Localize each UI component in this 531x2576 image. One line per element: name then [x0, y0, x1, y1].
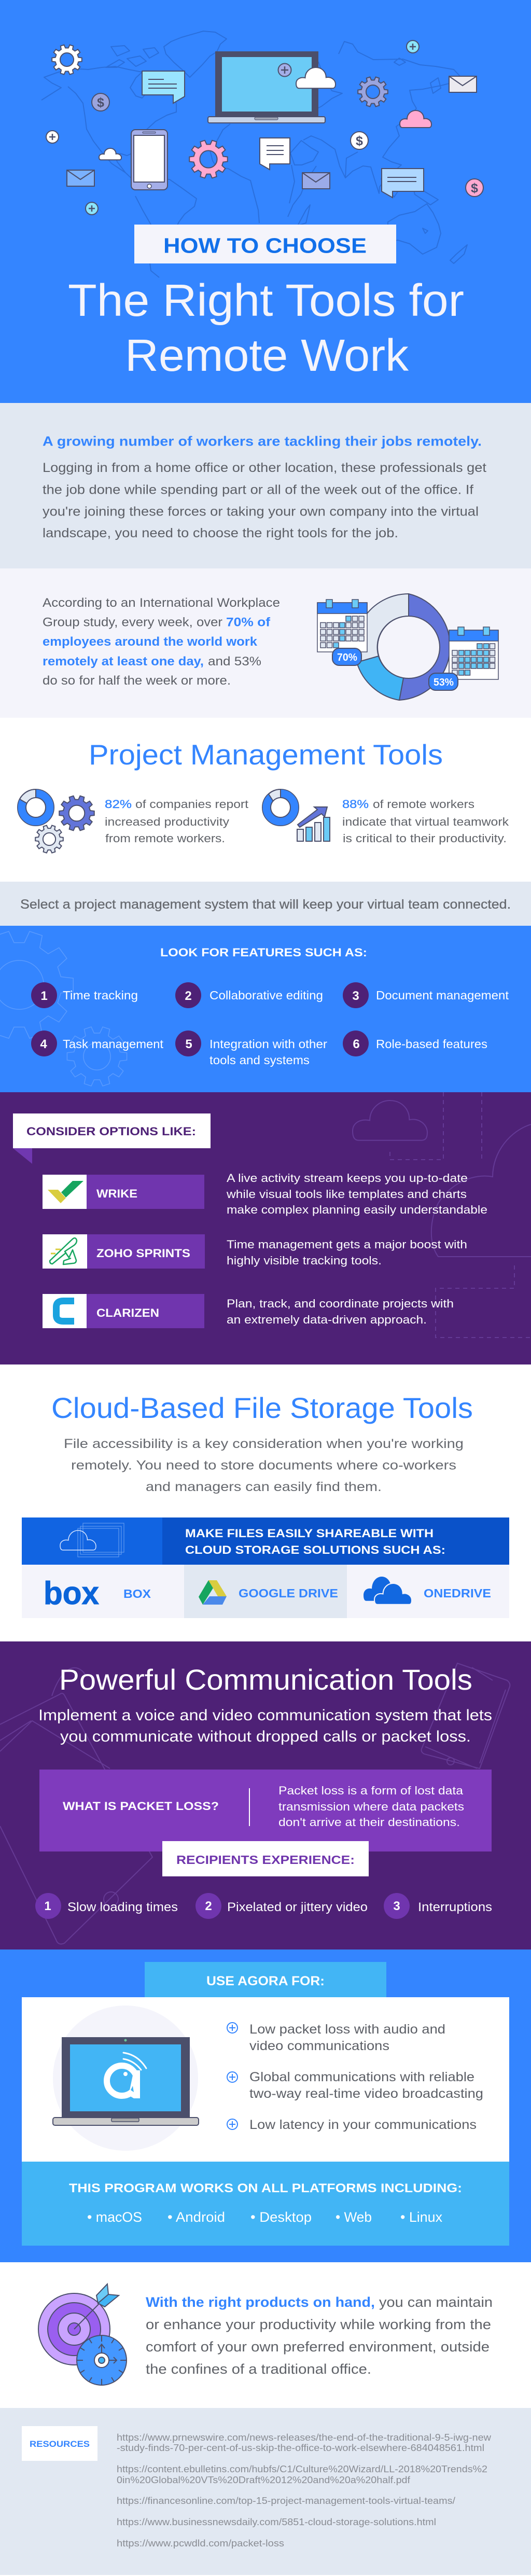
option description: wrike: A live activity stream keeps you up-to-date [227, 1172, 468, 1185]
provider: box [22, 1565, 184, 1618]
icon: speech bubble cyan [142, 71, 185, 103]
platform list: • Linux [400, 2209, 442, 2225]
heading label: how to choose [134, 225, 396, 263]
callout: packet loss [39, 1770, 492, 1851]
benefit 1: Low packet loss with audio and [249, 2022, 445, 2037]
experience 2: Pixelated or jittery video [227, 1900, 368, 1914]
study text [43, 596, 280, 688]
world map outline [41, 31, 467, 277]
icon: dollar coin pink [466, 179, 483, 197]
platform list: • Desktop [250, 2209, 312, 2225]
panel: conclusion [0, 2262, 531, 2408]
conclusion text: the confines of a traditional office. [146, 2361, 371, 2377]
study text: employees around the world work [43, 635, 258, 649]
icon: envelope periwinkle [302, 173, 330, 189]
stat: 88%: indicate that virtual teamwork [342, 815, 509, 828]
intro body text: Logging in from a home office or other location, these professionals get [43, 461, 486, 475]
provider: google drive: GOOGLE DRIVE [239, 1586, 338, 1600]
option description: clarizen [227, 1297, 454, 1326]
band text [185, 1527, 445, 1556]
card: platforms: THIS PROGRAM WORKS ON ALL PLATFORMS INCLUDING: [69, 2181, 462, 2195]
benefit 2: Global communications with reliable [249, 2070, 474, 2084]
intro body text: the job done while spending part or all of the week out of the office. If [43, 482, 473, 497]
icon: document bubble [260, 138, 290, 170]
study text: do so for half the week or more. [43, 674, 231, 688]
stat: 88% [342, 798, 509, 845]
feature 6: Role-based features [376, 1037, 487, 1051]
stat: 82%: from remote workers. [105, 832, 225, 845]
benefit 2: two-way real-time video broadcasting [249, 2086, 483, 2101]
option: zoho sprints [43, 1234, 205, 1269]
study text: According to an International Workplace [43, 596, 280, 610]
communication text [38, 1707, 492, 1745]
source list: https://financesonline.com/top-15-project-management-tools-virtual-teams/ [117, 2496, 455, 2506]
callout: packet loss: transmission where data packets [278, 1800, 464, 1813]
icon: white gear [52, 45, 82, 74]
stat: 88%: is critical to their productivity. [343, 832, 507, 845]
option description: clarizen: an extremely data-driven approach. [227, 1313, 427, 1326]
feature 6: 6 [353, 1037, 360, 1051]
option description: wrike [226, 1172, 487, 1216]
cloud storage text: remotely. You need to store documents where co-workers [71, 1458, 456, 1473]
band text: CLOUD STORAGE SOLUTIONS SUCH AS: [185, 1543, 445, 1556]
option: wrike [43, 1175, 204, 1209]
benefit 1: video communications [249, 2039, 389, 2053]
panel: resources [0, 2408, 531, 2575]
icon: laptop [208, 51, 325, 123]
badge: 53% [429, 673, 458, 690]
callout: packet loss: WHAT IS PACKET LOSS? [63, 1800, 219, 1813]
feature 4: Task management [63, 1037, 164, 1051]
card: agora benefits [22, 1997, 509, 2162]
feature 4 [31, 1031, 164, 1056]
panel: consider options [0, 1092, 531, 1364]
icon: dollar coin white [351, 132, 368, 149]
provider: google drive [184, 1565, 347, 1618]
platform list: • Android [167, 2209, 225, 2225]
experience 3: Interruptions [418, 1900, 492, 1914]
icon: calendar 53% [449, 627, 498, 679]
intro body text: landscape, you need to choose the right tools for the job. [43, 526, 398, 540]
stat: 82%: increased productivity [105, 815, 230, 828]
cloud storage text: File accessibility is a key consideration when you're working [64, 1437, 464, 1451]
label: recipients experience [162, 1841, 369, 1876]
panel: hero [0, 0, 531, 403]
experience 3 [384, 1893, 492, 1919]
provider: box: BOX [123, 1587, 151, 1600]
heading: consider options like [13, 1113, 211, 1164]
heading: cloud storage tools: Cloud-Based File Storage Tools [51, 1391, 473, 1424]
stat: 82%: of companies report [135, 798, 249, 811]
tab: use agora for: USE AGORA FOR: [206, 1974, 325, 1988]
panel: study statistic [0, 568, 531, 718]
icon: blue gear [59, 796, 94, 830]
option description: zoho sprints: Time management gets a major boost with [227, 1238, 467, 1251]
option: clarizen: CLARIZEN [96, 1306, 159, 1319]
panel: cloud storage [0, 1364, 531, 1641]
donut chart [355, 594, 450, 700]
provider: onedrive [347, 1565, 509, 1618]
badge: 70%: 70% [337, 652, 357, 663]
icon: envelope light [449, 76, 477, 92]
conclusion text [146, 2294, 493, 2377]
panel: features [0, 926, 531, 1092]
icon: speech bubble blue [382, 169, 424, 198]
icon: 88% donut [267, 789, 295, 821]
option: clarizen [43, 1294, 204, 1328]
conclusion text: With the right products on hand, [146, 2294, 375, 2310]
stat: 82%: 82% [105, 798, 132, 811]
panel: communication tools [0, 1641, 531, 1950]
experience 2: 2 [205, 1899, 212, 1913]
panel: intro [0, 403, 531, 568]
experience 3: 3 [393, 1899, 400, 1913]
feature 1: Time tracking [63, 988, 138, 1002]
band: shareable files [22, 1517, 509, 1565]
experience 1 [35, 1893, 178, 1919]
panel: project management tools [0, 718, 531, 882]
source list: -study-finds-70-per-cent-of-us-skip-the-office-to-work-elsewhere-684048561.html [117, 2443, 484, 2453]
icon: calendar 70% [317, 600, 367, 652]
feature 2 [175, 982, 323, 1008]
intro body text [43, 461, 486, 540]
band text: MAKE FILES EASILY SHAREABLE WITH [185, 1527, 434, 1540]
heading label: how to choose: HOW TO CHOOSE [163, 233, 367, 257]
heading: powerful communication tools: Powerful Communication Tools [59, 1663, 472, 1696]
icon: dollar coin pink: $ [471, 181, 478, 196]
panel: select band [0, 882, 531, 926]
source list: https://content.ebulletins.com/hubfs/C1/Culture%20Wizard/LL-2018%20Trends%2 [117, 2464, 487, 2474]
experience 1: Slow loading times [67, 1900, 178, 1914]
platform list: • macOS [87, 2209, 142, 2225]
icon: periwinkle gear [358, 77, 388, 106]
feature 3: 3 [352, 989, 359, 1003]
source list: https://www.prnewswire.com/news-releases/the-end-of-the-traditional-9-5-iwg-new [117, 2432, 492, 2443]
conclusion text: comfort of your own preferred environment, outside [146, 2339, 490, 2355]
label: resources: RESOURCES [30, 2439, 90, 2449]
feature 5 [175, 1031, 327, 1067]
label: resources [22, 2426, 97, 2461]
option description: wrike: make complex planning easily understandable [227, 1203, 487, 1216]
source list [117, 2432, 492, 2549]
icon: cloud and files [60, 1523, 124, 1557]
stat: 88%: 88% [342, 798, 369, 811]
heading: look for features: LOOK FOR FEATURES SUCH AS: [160, 946, 367, 959]
option description: zoho sprints [227, 1238, 467, 1267]
option description: wrike: while visual tools like templates and charts [226, 1188, 467, 1201]
icon: small white cloud [99, 148, 121, 160]
stat: 88%: of remote workers [373, 798, 474, 811]
icon: plus cyan top [407, 40, 419, 53]
card: platforms [22, 2162, 509, 2246]
feature 3 [343, 982, 509, 1008]
option: zoho sprints: ZOHO SPRINTS [96, 1247, 190, 1260]
conclusion text: or enhance your productivity while working from the [146, 2317, 491, 2332]
tab: use agora for [145, 1962, 386, 1997]
badge: 70% [332, 648, 361, 665]
panel: agora [0, 1950, 531, 2262]
provider: onedrive: ONEDRIVE [424, 1586, 491, 1600]
icon: dollar coin periwinkle [92, 93, 109, 111]
title: Remote Work [125, 330, 409, 381]
intro body text: you're joining these forces or taking your own company into the virtual [43, 504, 479, 519]
conclusion text: you can maintain [379, 2294, 493, 2310]
icon: white cloud [296, 67, 336, 88]
feature 3: Document management [376, 988, 509, 1002]
feature 2: 2 [185, 989, 192, 1003]
option description: clarizen: Plan, track, and coordinate projects with [227, 1297, 454, 1310]
option description: zoho sprints: highly visible tracking tools. [227, 1254, 382, 1267]
source list: 0in%20Global%20VTs%20Draft%2012%20and%20a%20half.pdf [117, 2475, 411, 2485]
communication text: Implement a voice and video communication system that lets [38, 1707, 492, 1724]
callout: packet loss: Packet loss is a form of lost data [278, 1784, 464, 1797]
icon: small gray gear [35, 825, 63, 853]
icon: growth bars and arrow [297, 807, 330, 841]
stat: 82% [105, 798, 249, 845]
icon: laptop with agora logo [53, 2006, 199, 2151]
feature 1 [31, 982, 138, 1008]
provider: box: box [44, 1576, 99, 1611]
cloud storage text [64, 1437, 464, 1494]
decorative gears [0, 931, 127, 1086]
benefit 1 [227, 2022, 445, 2053]
study text: Group study, every week, over [43, 615, 222, 630]
heading: project management tools: Project Management Tools [89, 739, 443, 771]
platform list: • Web [336, 2209, 372, 2225]
decorative cloud and dashes [353, 1092, 531, 1338]
icon: dollar coin white: $ [356, 134, 363, 148]
feature 5: 5 [185, 1037, 192, 1051]
benefit 3: Low latency in your communications [249, 2118, 477, 2132]
platform list [87, 2209, 442, 2225]
benefit 2 [227, 2070, 483, 2101]
title [68, 275, 464, 381]
feature 2: Collaborative editing [209, 988, 323, 1002]
feature 5: tools and systems [209, 1053, 310, 1067]
panel: select band: Select a project management system that will keep your virtual team connected. [20, 897, 511, 912]
experience 1: 1 [44, 1899, 51, 1913]
feature 6 [343, 1031, 487, 1056]
study text: 70% of [226, 615, 271, 630]
study text: and 53% [208, 655, 261, 669]
icon: phone [131, 130, 167, 190]
title: The Right Tools for [68, 275, 464, 326]
option: wrike: WRIKE [96, 1187, 137, 1200]
feature 5: Integration with other [209, 1037, 327, 1051]
decorative phones [0, 1663, 510, 1944]
source list: https://www.pcwdld.com/packet-loss [117, 2538, 284, 2549]
icon: pink gear [189, 141, 228, 178]
source list: https://www.businessnewsdaily.com/5851-cloud-storage-solutions.html [117, 2517, 436, 2527]
icon: 82% donut [20, 789, 50, 821]
icon: target and clock [38, 2284, 127, 2385]
icon: plus cyan bottom [86, 202, 98, 215]
icon: plus on screen [278, 63, 291, 77]
experience 2 [195, 1893, 368, 1919]
feature 4: 4 [40, 1037, 47, 1051]
heading: consider options like: CONSIDER OPTIONS LIKE: [26, 1125, 196, 1138]
icon: pink cloud [400, 110, 431, 128]
cloud storage text: and managers can easily find them. [146, 1480, 382, 1494]
feature 1: 1 [40, 989, 48, 1003]
intro heading: A growing number of workers are tackling their jobs remotely. [43, 434, 482, 449]
icon: envelope blue [67, 170, 94, 186]
study text: remotely at least one day, [43, 655, 204, 669]
callout: packet loss: don't arrive at their destinations. [278, 1816, 460, 1829]
icon: dollar coin periwinkle: $ [97, 95, 104, 110]
label: recipients experience: RECIPIENTS EXPERIENCE: [176, 1853, 355, 1867]
communication text: you communicate without dropped calls or packet loss. [60, 1728, 471, 1745]
icon: plus white [46, 131, 59, 143]
badge: 53%: 53% [434, 677, 454, 688]
